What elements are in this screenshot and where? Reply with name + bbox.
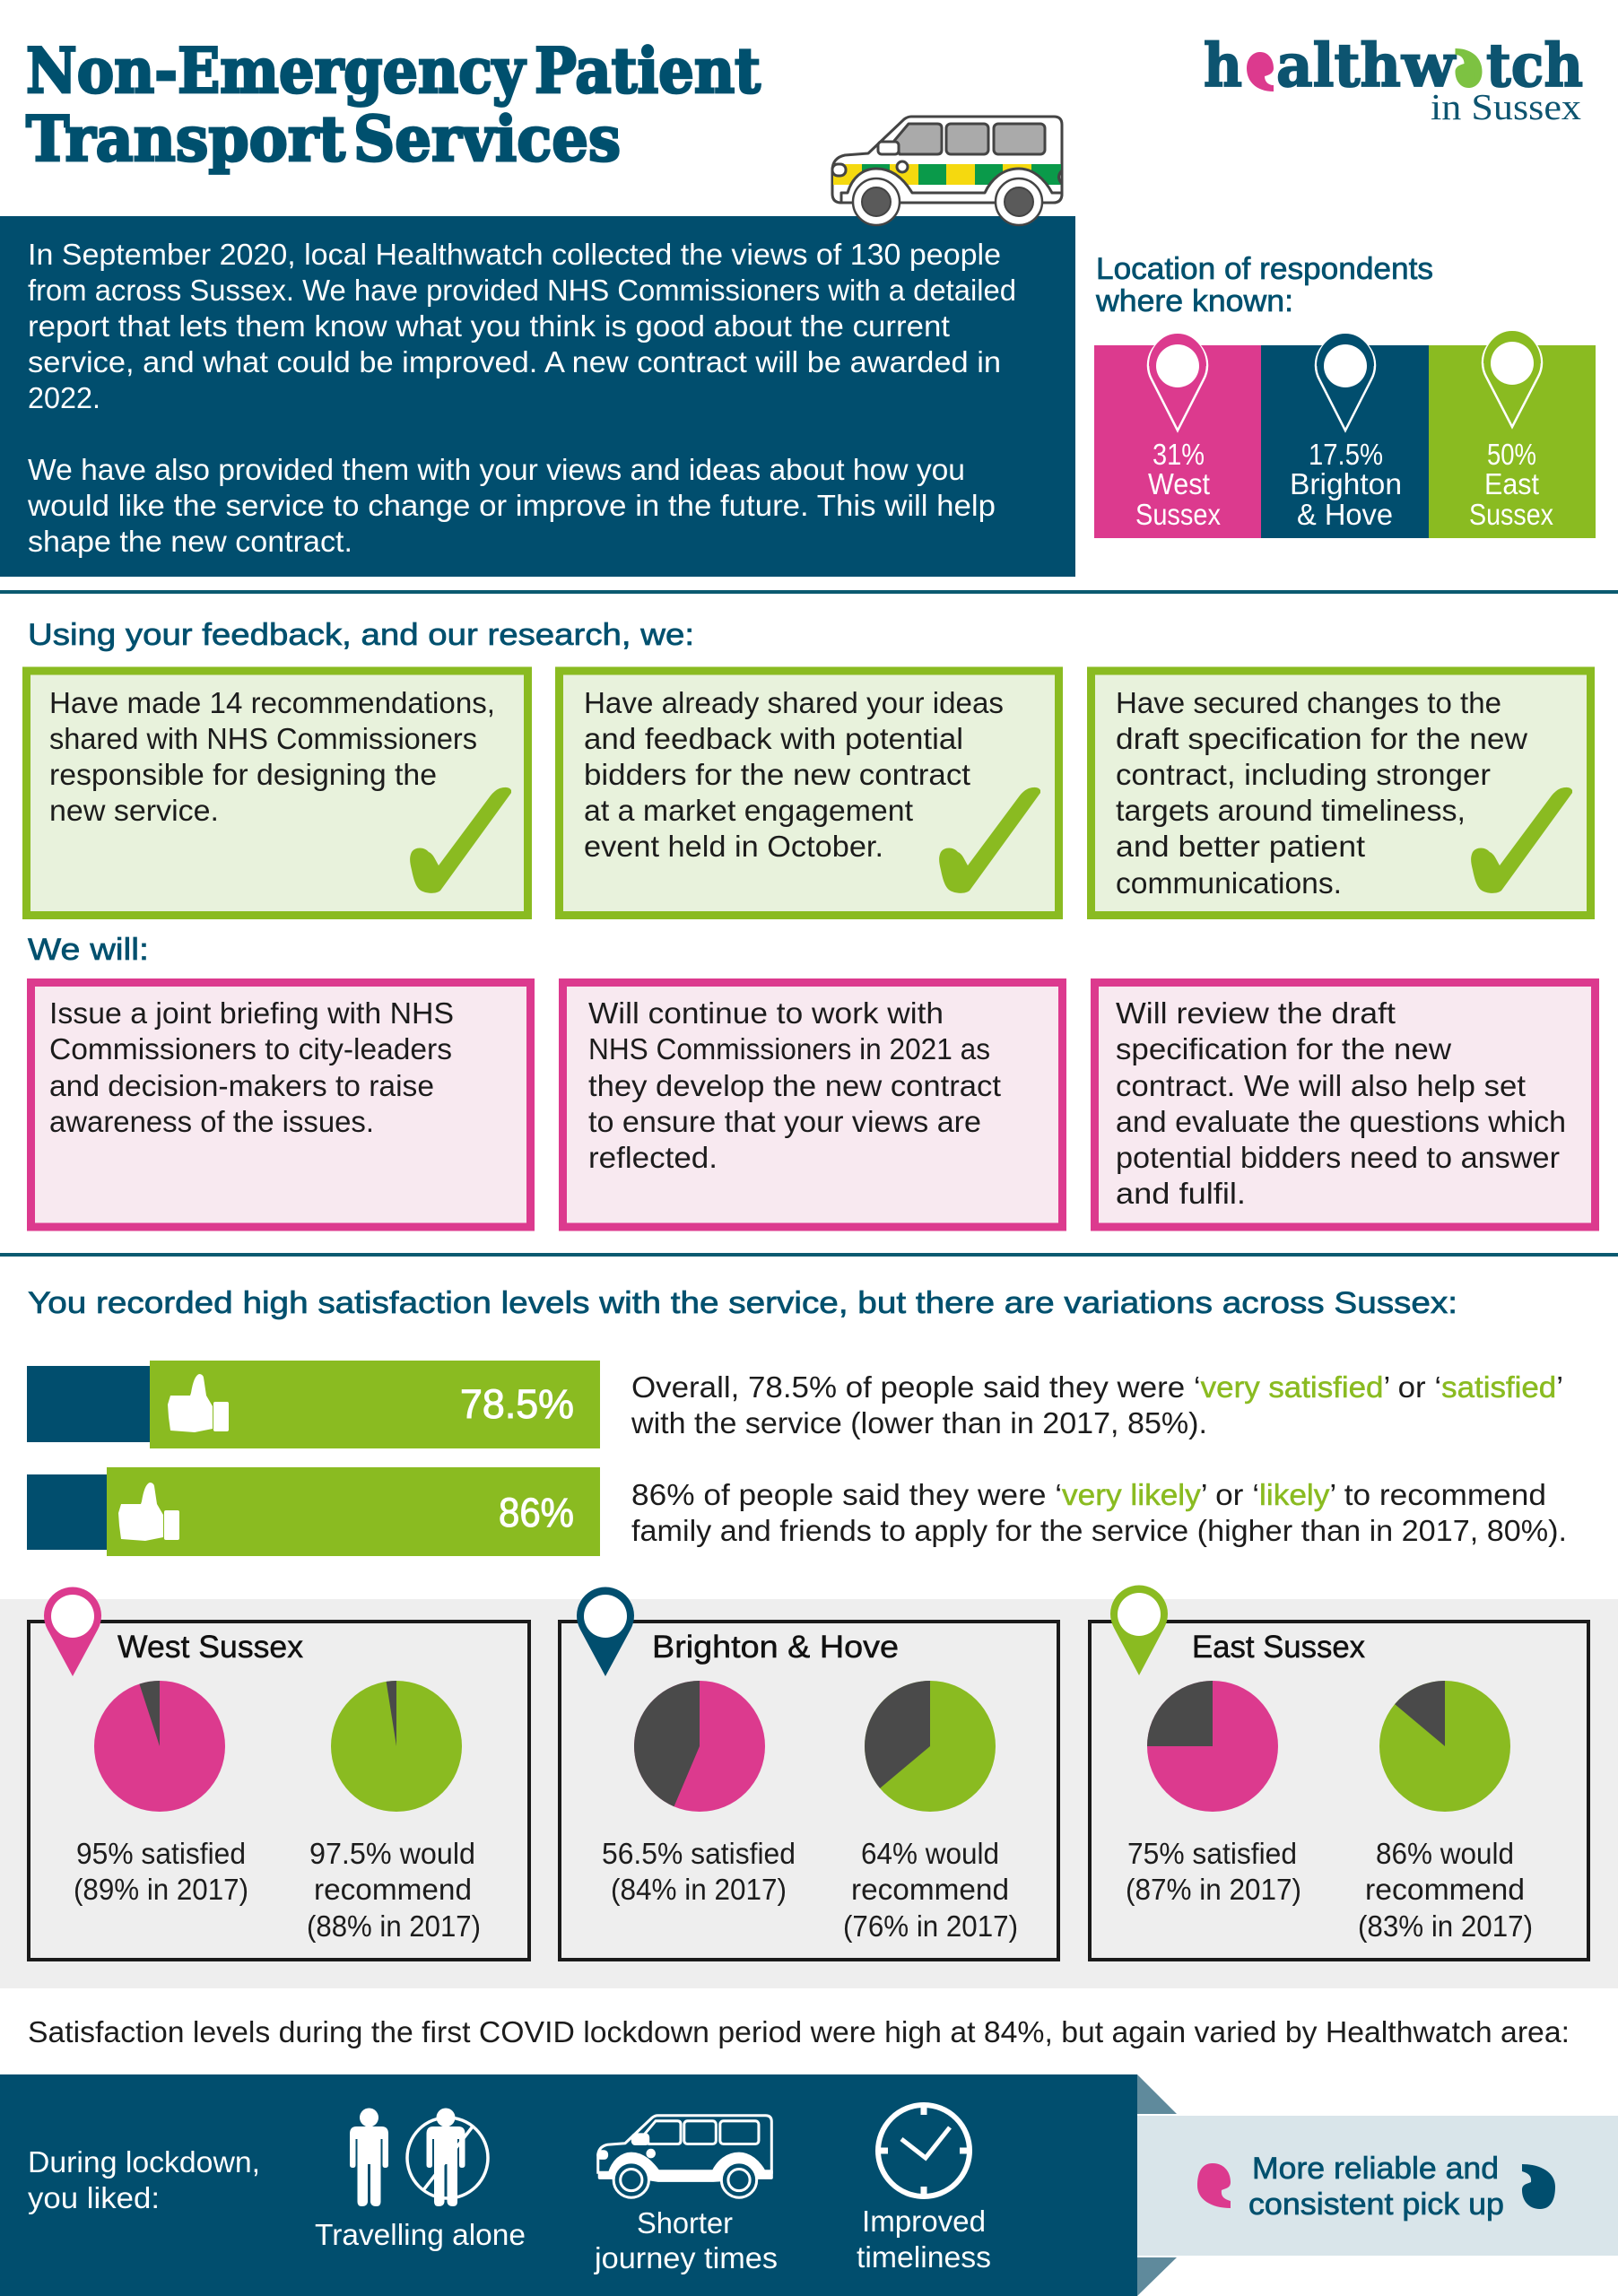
intro text: shape the new contract. [28,525,352,558]
panel: shared with bidders: at a market engagement [584,794,913,827]
intro text: service, and what could be improved. A new contract will be awarded in [28,345,1001,378]
bar: 78.5% satisfied [27,1361,600,1448]
panel: draft specification changes: communications. [1116,866,1342,900]
icon: thumbs up [168,1374,229,1432]
pie: 56.5% satisfied [634,1681,765,1812]
panel: continue to work: NHS Commissioners in 2021 as [588,1032,990,1065]
heading: location of respondents: Location of respondents [1096,252,1433,286]
panel: recommendations: responsible for designing the [49,758,437,791]
icon: tick [1471,787,1572,893]
panel: Brighton and Hove: 56.5% satisfied [602,1837,796,1870]
text: overall satisfaction: Overall, 78.5% of people said they were ‘ very satisfied ’ or ‘satisfied’ [631,1370,1563,1404]
panel: recommendations: Have made 14 recommendations, [49,686,495,719]
bar: 86% recommend: 86% [499,1490,574,1535]
panel: continue to work: to ensure that your views are [588,1105,981,1138]
pie: 97.5% recommend [331,1681,462,1812]
panel: East Sussex: (87% in 2017) [1126,1873,1301,1906]
heading: location of respondents: where known: [1095,284,1293,318]
panel: West Sussex: West Sussex [117,1630,304,1665]
title: Transport [26,103,345,176]
panel: East Sussex: recommend [1365,1873,1525,1906]
logo: healthwatch in Sussex: h [1204,30,1242,100]
intro text: from across Sussex. We have provided NHS Commissioners with a detailed [28,274,1016,307]
icon: clock with tick hands [878,2105,970,2196]
panel: during lockdown: During lockdown, [28,2145,260,2179]
intro text: report that lets them know what you think is good about the current [28,309,950,343]
tile: West Sussex 31%: West [1148,467,1210,500]
pie: 75% satisfied [1147,1681,1278,1812]
panel: shared with bidders: event held in October. [584,830,883,863]
tile: East Sussex 50%: 50% [1487,438,1536,471]
panel: during lockdown: Travelling alone [315,2218,526,2251]
logo: healthwatch in Sussex: w [1401,30,1457,100]
panel: West Sussex: (89% in 2017) [74,1873,248,1906]
tile: West Sussex 31%: Sussex [1135,498,1221,531]
panel: during lockdown: Shorter [637,2206,733,2239]
panel: draft specification changes: targets around timeliness, [1116,794,1466,827]
tile: Brighton and Hove 17.5%: & Hove [1297,498,1393,531]
panel: East Sussex: 75% satisfied [1127,1837,1297,1870]
panel: introduction [0,216,1075,577]
panel: West Sussex: 97.5% would [309,1837,475,1870]
panel: shared with bidders: Have already shared your ideas [584,686,1004,719]
panel: shared with bidders: bidders for the new contract [584,758,970,791]
logo: healthwatch in Sussex: tch [1486,30,1583,100]
heading: location of respondents [1095,252,1433,318]
icon: pink speech mark [1197,2163,1231,2208]
title [26,35,761,176]
panel: continue to work: reflected. [588,1141,718,1174]
text: overall satisfaction: with the service (lower than in 2017, 85%). [631,1406,1207,1439]
logo: healthwatch in Sussex: e [1252,48,1268,83]
title: Services [353,103,621,176]
panel: West Sussex [29,1587,529,1960]
tile: Brighton and Hove 17.5%: 17.5% [1309,438,1383,471]
icon: tick [939,787,1040,893]
bar: 78.5% satisfied: 78.5% [460,1381,574,1427]
panel: draft specification changes: contract, including stronger [1116,758,1491,791]
callout fold and band [1137,2074,1618,2296]
logo: healthwatch in Sussex: a [1461,53,1477,89]
panel: review the draft: and evaluate the questions which [1116,1105,1566,1138]
panel: review the draft: specification for the new [1116,1032,1451,1065]
panel: during lockdown: Improved [862,2205,986,2238]
text: likely to recommend: 86% of people said they were ‘ very likely ’ or ‘likely’ to recommend [631,1478,1546,1511]
panel: Brighton and Hove: 64% would [861,1837,999,1870]
panel: Brighton and Hove: (76% in 2017) [843,1909,1018,1943]
logo: healthwatch in Sussex: in Sussex [1431,86,1581,127]
panel: Brighton and Hove [560,1587,1058,1960]
panel: shared with bidders: and feedback with potential [584,722,963,755]
panel: joint briefing [30,983,531,1227]
panel: during lockdown [0,2074,1137,2296]
text: likely to recommend [631,1478,1567,1547]
text: likely to recommend: family and friends to apply for the service (higher than in 2017, 80%). [631,1514,1567,1547]
tile: West Sussex 31% [1094,335,1261,538]
panel: draft specification changes: and better patient [1116,830,1365,863]
tile: East Sussex 50%: East [1484,467,1539,500]
panel: East Sussex: East Sussex [1192,1630,1365,1665]
panel: West Sussex: recommend [314,1873,472,1906]
panel: Brighton and Hove: (84% in 2017) [611,1873,787,1906]
icon: white outline van [598,2116,771,2197]
callout: more reliable pick up: More reliable and [1252,2152,1499,2186]
panel: during lockdown: you liked: [28,2181,160,2214]
tile: Brighton and Hove 17.5% [1261,335,1429,538]
panel: joint briefing: awareness of the issues. [49,1105,374,1138]
panel: draft specification changes: Have secured changes to the [1116,686,1501,719]
panel: draft specification changes: draft specification for the new [1116,722,1527,755]
panel: continue to work: they develop the new contract [588,1069,1001,1102]
heading: we will: We will: [28,933,149,967]
icon: thumbs up [118,1483,179,1541]
panel: continue to work [563,983,1062,1227]
panel: review the draft: contract. We will also help set [1116,1069,1526,1102]
pie: 64% recommend [865,1681,996,1812]
panel: East Sussex: (83% in 2017) [1358,1909,1533,1943]
bar: 86% recommend [27,1467,600,1556]
panel: joint briefing: Issue a joint briefing with NHS [49,996,454,1030]
title: Non-Emergency [26,35,526,108]
panel: review the draft: Will review the draft [1116,996,1396,1030]
intro text: In September 2020, local Healthwatch collected the views of 130 people [28,238,1001,271]
heading: high satisfaction: You recorded high satisfaction levels with the service, but there are variations across Sussex: [28,1286,1457,1320]
panel: East Sussex [1090,1586,1588,1960]
panel: review the draft: and fulfil. [1116,1177,1246,1210]
panel: Brighton and Hove: Brighton & Hove [652,1630,899,1665]
logo: healthwatch in Sussex: alth [1276,30,1401,100]
panel: during lockdown: journey times [594,2241,778,2274]
intro text: We have also provided them with your views and ideas about how you [28,453,965,486]
panel: West Sussex: (88% in 2017) [307,1909,481,1943]
callout: more reliable pick up [1197,2152,1555,2222]
tile: East Sussex 50% [1429,333,1596,538]
panel: recommendations: shared with NHS Commissioners [49,722,477,755]
panel: joint briefing: and decision-makers to raise [49,1069,434,1102]
panel: East Sussex: 86% would [1376,1837,1514,1870]
icon: person alone and crossed-out person [350,2108,488,2206]
panel: recommendations [27,671,527,915]
panel: West Sussex: 95% satisfied [76,1837,246,1870]
panel: continue to work: Will continue to work with [588,996,944,1030]
icon: tick [410,787,511,893]
panel: regional band [0,1586,1618,1988]
heading: using your feedback: Using your feedback, and our research, we: [28,618,694,652]
panel: review the draft [1094,983,1595,1227]
text: COVID lockdown satisfaction: Satisfaction levels during the first COVID lockdown period were high at 84%, but again varied by Healthwatch area: [28,2015,1570,2048]
callout: more reliable pick up: consistent pick up [1248,2187,1504,2222]
panel: during lockdown: timeliness [857,2240,991,2274]
panel: draft specification changes [1091,671,1591,915]
tile: Brighton and Hove 17.5%: Brighton [1290,467,1402,500]
tile: West Sussex 31%: 31% [1153,438,1205,471]
panel: joint briefing: Commissioners to city-leaders [49,1032,452,1065]
icon: ambulance van [832,117,1062,225]
intro text: 2022. [28,381,100,414]
panel: shared with bidders [560,671,1058,915]
panel: recommendations: new service. [49,794,219,827]
intro text: would like the service to change or improve in the future. This will help [27,489,996,522]
intro text [27,238,1016,558]
title: Patient [535,35,761,108]
text: overall satisfaction [631,1370,1563,1439]
tile: East Sussex 50%: Sussex [1469,498,1553,531]
logo: healthwatch in Sussex [1204,30,1583,127]
panel: Brighton and Hove: recommend [851,1873,1009,1906]
pie: 86% recommend [1379,1681,1510,1812]
pie: 95% satisfied [94,1681,225,1812]
panel: review the draft: potential bidders need to answer [1116,1141,1560,1174]
